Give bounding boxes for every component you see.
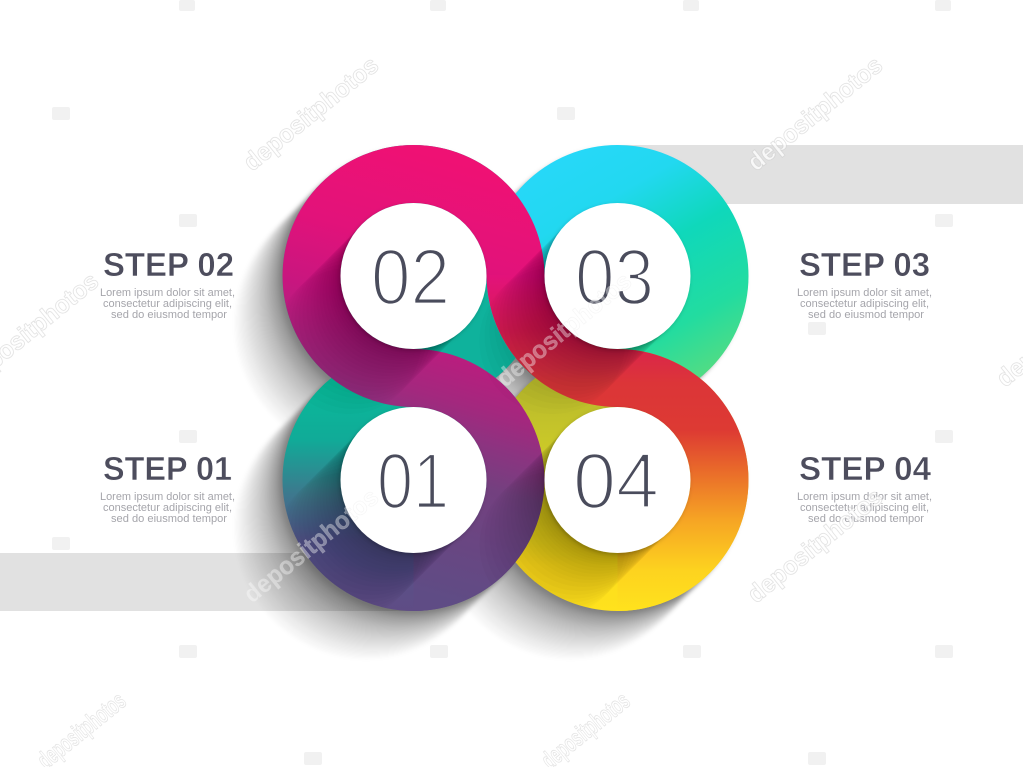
body: step 01: consectetur adipiscing elit, xyxy=(103,502,232,514)
body: step 02 xyxy=(100,287,235,321)
ring segment: teal to violet, step 01 xyxy=(282,349,544,611)
white disc 04 xyxy=(544,407,690,553)
body: step 01: Lorem ipsum dolor sit amet, xyxy=(100,491,235,503)
stock photo watermarks: depositphotos xyxy=(238,483,384,609)
ribbon: pink through red to yellow xyxy=(486,275,748,611)
white disc 03 xyxy=(544,203,690,349)
body: step 01 xyxy=(100,491,235,525)
interlaced ring graphic xyxy=(276,145,748,618)
body: step 04 xyxy=(797,491,932,525)
body: step 04: sed do eiusmod tempor xyxy=(808,513,924,525)
ring segment: teal under step 02 xyxy=(282,145,544,407)
white disc 01 xyxy=(340,407,486,553)
number 01: 01 xyxy=(377,436,449,525)
stock photo watermarks: depositphotos xyxy=(742,483,888,609)
heading: step 03: STEP 03 xyxy=(799,246,930,283)
ring segment: cyan to green, step 03 xyxy=(486,145,748,407)
body: step 04: Lorem ipsum dolor sit amet, xyxy=(797,491,932,503)
stock photo watermarks: depositphotos xyxy=(491,267,637,393)
text block: step 01 xyxy=(100,450,235,525)
body: step 02: sed do eiusmod tempor xyxy=(111,309,227,321)
ground long shadow of the circles xyxy=(236,146,748,658)
number 03: 03 xyxy=(575,232,654,321)
number 02: 02 xyxy=(371,232,450,321)
body: step 03 xyxy=(797,287,932,321)
body: step 02: consectetur adipiscing elit, xyxy=(103,298,232,310)
grey banner right xyxy=(617,145,1023,204)
text block: step 04 xyxy=(797,450,932,525)
stock photo watermarks: depositphotos xyxy=(742,51,888,177)
body: step 03: sed do eiusmod tempor xyxy=(808,309,924,321)
body: step 03: Lorem ipsum dolor sit amet, xyxy=(797,287,932,299)
body: step 04: consectetur adipiscing elit, xyxy=(800,502,929,514)
text block: step 02 xyxy=(100,246,235,321)
heading: step 04: STEP 04 xyxy=(799,450,932,487)
heading: step 01: STEP 01 xyxy=(103,450,232,487)
number 04: 04 xyxy=(573,436,659,525)
body: step 03: consectetur adipiscing elit, xyxy=(800,298,929,310)
long shadows cast by the white discs xyxy=(288,230,662,606)
body: step 02: Lorem ipsum dolor sit amet, xyxy=(100,287,235,299)
grey banner left xyxy=(0,553,414,611)
text block: step 03 xyxy=(797,246,932,321)
ribbon: pink to purple xyxy=(282,145,544,611)
heading: step 02: STEP 02 xyxy=(103,246,234,283)
body: step 01: sed do eiusmod tempor xyxy=(111,513,227,525)
stock photo watermarks: depositphotos xyxy=(238,51,384,177)
white disc 02 xyxy=(340,203,486,349)
ring segment: olive to yellow, step 04 xyxy=(486,349,748,611)
